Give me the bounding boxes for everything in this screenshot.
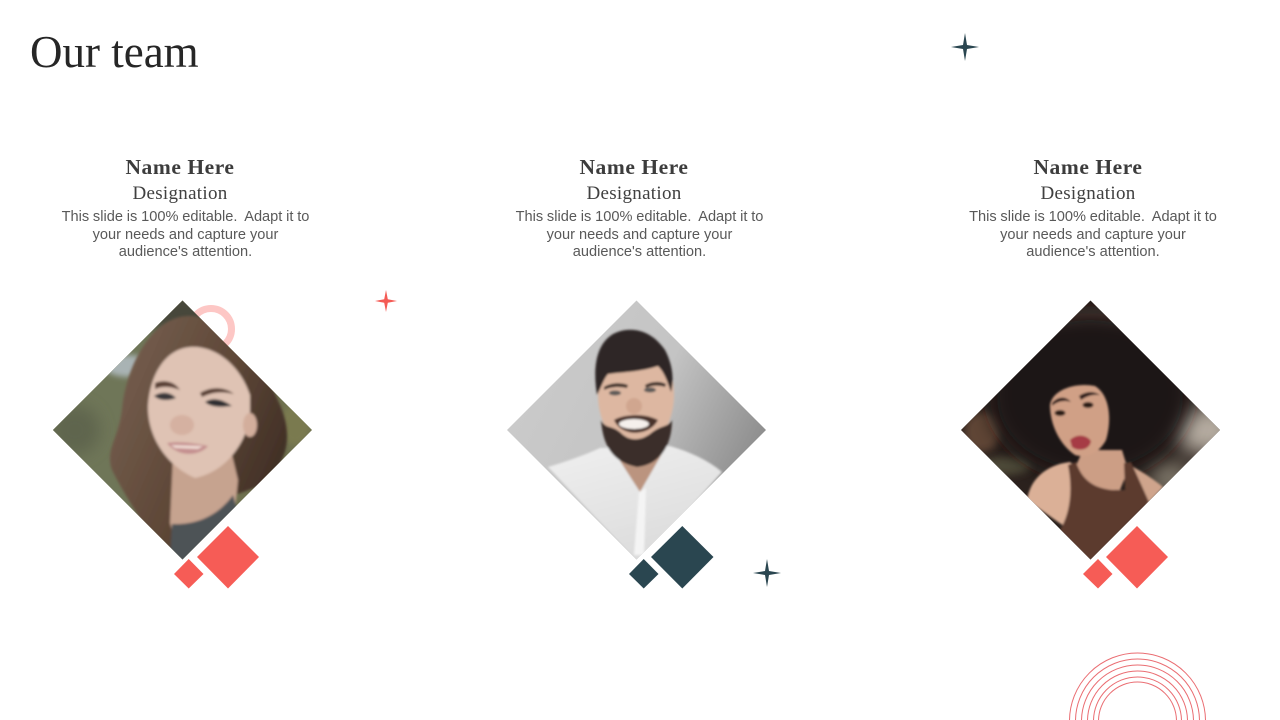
portrait three with accents (961, 300, 1220, 588)
coral small diamond (1083, 559, 1112, 588)
name one: Name Here (125, 154, 235, 178)
description three: This slide is 100% editable. Adapt it to your needs and capture your audience's attention. (969, 209, 1217, 260)
description two: This slide is 100% editable. Adapt it to your needs and capture your audience's attention. (516, 209, 763, 260)
photo: man (504, 298, 769, 565)
portrait one with accents (53, 300, 312, 588)
dark large diamond (651, 526, 714, 588)
icon: coral sparkle (375, 290, 397, 312)
portrait two with accents (507, 300, 781, 588)
panel: team member three (961, 154, 1220, 588)
icon: dark sparkle top (951, 33, 979, 61)
description one: This slide is 100% editable. Adapt it to your needs and capture your audience's attention. (62, 209, 309, 260)
designation three: Designation (1040, 183, 1136, 204)
dark small diamond (629, 559, 658, 588)
coral large diamond (1106, 526, 1168, 588)
concentric arcs bottom right (1069, 652, 1206, 720)
name three: Name Here (1033, 154, 1143, 178)
name two: Name Here (579, 154, 689, 178)
pink ring (190, 308, 232, 350)
photo: woman (50, 290, 315, 563)
designation two: Designation (586, 183, 682, 204)
panel: team member two (507, 154, 781, 588)
panel: team member one (53, 154, 312, 588)
designation one: Designation (132, 183, 228, 204)
title: Our team (30, 26, 199, 76)
photo: woman with curly hair (958, 298, 1237, 563)
coral small diamond (174, 559, 204, 588)
icon: dark sparkle bottom (753, 559, 781, 587)
coral large diamond (197, 526, 259, 588)
